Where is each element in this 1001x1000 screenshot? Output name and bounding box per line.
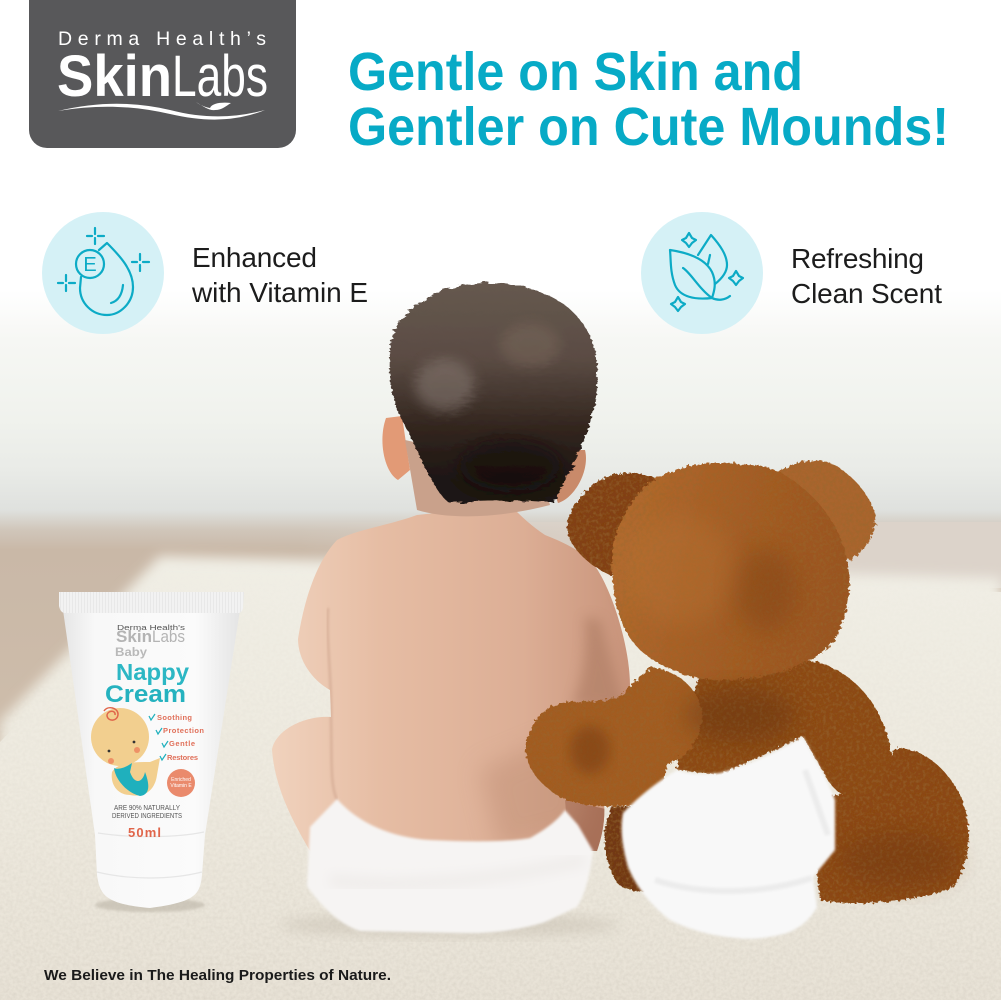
product tube (59, 592, 244, 912)
tube benefits: Protection (163, 726, 204, 735)
bear left ear (567, 473, 660, 575)
tube claim: DERIVED INGREDIENTS (112, 813, 182, 820)
diaper shading (330, 860, 585, 884)
baby hair (390, 283, 598, 503)
icon: leaves (641, 212, 763, 334)
text: refreshing clean scent: Refreshing (791, 243, 924, 274)
logo swoosh and leaf (58, 102, 265, 120)
tube claim (112, 805, 182, 820)
baby (272, 283, 630, 937)
baby nape (405, 440, 550, 516)
tube crimp line (97, 832, 204, 878)
baby body (272, 505, 630, 851)
tube brand: Labs (152, 627, 185, 646)
logo text: Derma Health’s (58, 28, 266, 50)
bear arm (526, 667, 702, 807)
text: refreshing clean scent: Clean Scent (791, 278, 942, 309)
text: enhanced with vitamin E (191, 242, 368, 308)
diaper shading (655, 770, 828, 891)
tube badge: Vitamin E (170, 783, 192, 789)
tube badge: Enriched (171, 777, 191, 783)
baby right ear (550, 450, 586, 503)
floor band right (300, 522, 1001, 588)
carpet texture (0, 861, 1001, 1000)
tube brand (115, 623, 185, 659)
tube product name: Cream (105, 681, 186, 708)
title: Gentler on Cute Mounds! (348, 97, 949, 157)
icon: vitamin E drop (42, 212, 164, 334)
bear leg (810, 748, 969, 903)
tube claim: ARE 90% NATURALLY (114, 805, 180, 812)
body shading (328, 608, 625, 860)
tube product name: Nappy (116, 659, 189, 685)
baby shadow (280, 913, 620, 937)
bear diaper (622, 737, 835, 939)
tube cap (59, 592, 244, 613)
logo wordmark: Labs (172, 44, 268, 109)
text: enhanced with vitamin E: Enhanced (192, 242, 317, 273)
carpet soft edge (0, 556, 1001, 1000)
logo wordmark (57, 44, 268, 109)
baby left ear (382, 416, 410, 480)
title (348, 42, 949, 157)
tube brand: Derma Health's (117, 623, 185, 632)
feature: clean scent (641, 212, 942, 334)
tube benefits (149, 713, 204, 762)
logo panel (29, 0, 296, 148)
bear head (612, 463, 849, 680)
footer tagline: We Believe in The Healing Properties of Nature. (44, 967, 391, 984)
tube benefits: Gentle (169, 739, 195, 748)
bear fur shading (570, 515, 960, 888)
bear right ear (760, 460, 875, 560)
tube shadow (95, 898, 205, 912)
text: enhanced with vitamin E: with Vitamin E (191, 277, 368, 308)
baby diaper (307, 799, 593, 933)
photo background (0, 327, 1001, 1000)
tube brand: Baby (115, 645, 147, 659)
icon: vitamin E drop: E (83, 254, 97, 276)
tube brand: Skin (116, 627, 152, 646)
tube badge (167, 769, 195, 797)
bear rear leg (605, 805, 650, 891)
carpet (0, 572, 1001, 1000)
tube body (63, 610, 240, 908)
tube size: 50ml (128, 825, 161, 840)
title: Gentle on Skin and (348, 42, 803, 102)
tube product name (105, 659, 189, 708)
text: refreshing clean scent (791, 243, 942, 309)
tube baby illustration (91, 708, 160, 796)
feature: vitamin E (42, 212, 368, 334)
teddy bear (526, 460, 969, 939)
tube benefits: Soothing (157, 713, 192, 722)
tube benefits: Restores (167, 753, 198, 762)
bear body (677, 660, 891, 797)
logo wordmark: Skin (57, 44, 172, 109)
